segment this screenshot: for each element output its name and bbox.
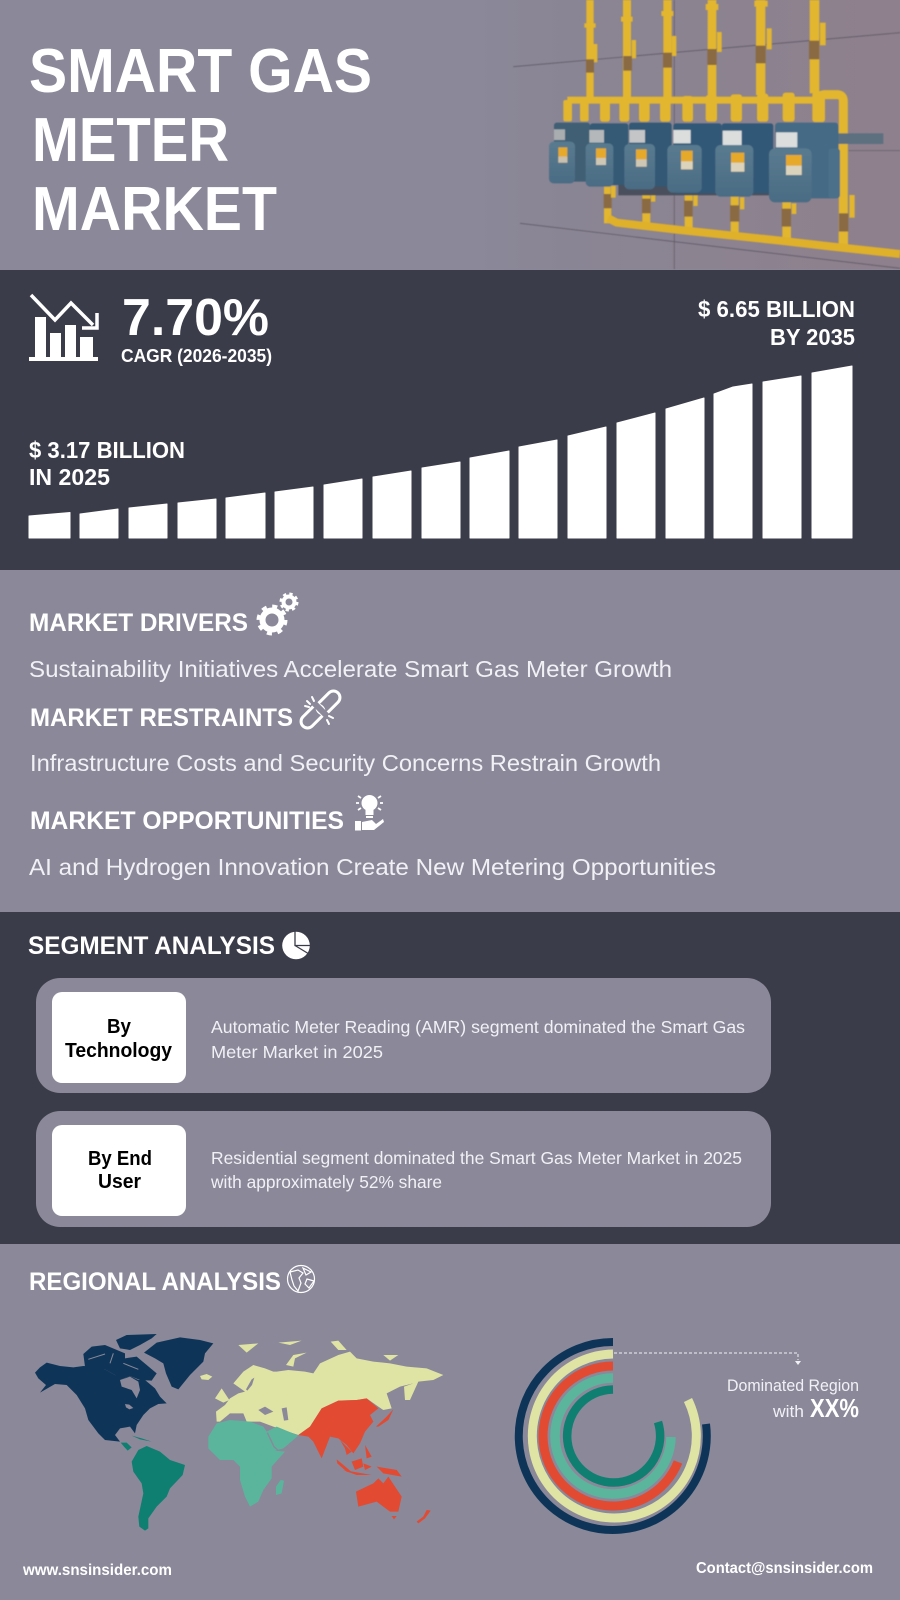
gas meter 5 <box>715 123 773 197</box>
footer: website: www.snsinsider.com <box>22 1562 172 1579</box>
title: METER <box>32 106 229 175</box>
2025 value label: $ 3.17 BILLION <box>29 437 185 463</box>
heading: segment analysis: SEGMENT ANALYSIS <box>28 932 275 960</box>
text: end user segment <box>210 1148 742 1192</box>
photo: gas meters on wall <box>480 0 900 269</box>
panel: segment analysis <box>0 912 900 1244</box>
gas meter 6 <box>769 123 840 202</box>
icon: bar chart with trend arrow <box>29 295 98 361</box>
title <box>29 37 372 244</box>
bar chart: rising market size <box>29 366 852 538</box>
region: europe and north asia <box>200 1341 443 1435</box>
panel: header <box>0 0 900 270</box>
heading: market restraints: MARKET RESTRAINTS <box>30 704 293 732</box>
panel: regional analysis <box>0 1244 900 1600</box>
panel: market dynamics <box>0 570 900 912</box>
region: south america <box>121 1436 185 1531</box>
dashed leader arrow <box>614 1353 801 1365</box>
2035 value label <box>698 296 855 350</box>
callout: dominated region <box>727 1377 859 1423</box>
panel: market growth <box>0 270 900 570</box>
icon: globe <box>288 1266 314 1292</box>
card: by technology <box>36 978 771 1093</box>
text: end user segment: Residential segment dominated the Smart Gas Meter Market in 2025 <box>211 1148 742 1168</box>
label box: by technology: By <box>107 1016 132 1038</box>
2025 value label: IN 2025 <box>29 464 110 490</box>
gas meter 2 <box>586 123 628 187</box>
text: market drivers: Sustainability Initiatives Accelerate Smart Gas Meter Growth <box>29 656 672 682</box>
upper gas pipes <box>563 0 826 122</box>
card: by end user <box>36 1111 771 1227</box>
text: market restraints: Infrastructure Costs and Security Concerns Restrain Growth <box>30 750 661 776</box>
heading: market drivers: MARKET DRIVERS <box>29 609 248 637</box>
footer: contact email: Contact@snsinsider.com <box>696 1560 873 1577</box>
label box: by technology: Technology <box>65 1040 173 1062</box>
lower gas pipes <box>604 186 855 248</box>
title: SMART GAS <box>29 37 372 106</box>
icon: broken chain link <box>298 688 343 731</box>
CAGR label: CAGR (2026-2035) <box>121 345 272 366</box>
world map <box>35 1334 443 1531</box>
radial bar chart <box>519 1342 707 1530</box>
label box: by end user: User <box>98 1171 141 1193</box>
brass valves <box>586 41 848 232</box>
region: africa and middle east <box>208 1420 298 1507</box>
label box: by technology <box>52 992 186 1083</box>
CAGR value: 7.70% <box>122 289 269 347</box>
icon: pie chart <box>282 931 311 959</box>
heading: market opportunities: MARKET OPPORTUNITIES <box>30 807 344 835</box>
title: MARKET <box>32 175 277 244</box>
2035 value label: $ 6.65 BILLION <box>698 296 855 322</box>
icon: gears <box>258 594 297 634</box>
gas meter 1 <box>549 123 590 183</box>
text: end user segment: with approximately 52% share <box>210 1172 442 1192</box>
callout: dominated region: Dominated Region <box>727 1377 859 1395</box>
label box: by end user: By End <box>88 1148 152 1170</box>
gas meter 4 <box>667 123 722 193</box>
2025 value label <box>29 437 185 490</box>
region: asia pacific <box>298 1398 431 1523</box>
text: technology segment: Meter Market in 2025 <box>211 1042 383 1062</box>
text: market opportunities: AI and Hydrogen Innovation Create New Metering Opportunities <box>29 854 716 880</box>
2035 value label: BY 2035 <box>770 324 855 350</box>
region: north america <box>35 1334 213 1442</box>
label box: by end user <box>52 1125 186 1216</box>
text: technology segment: Automatic Meter Reading (AMR) segment dominated the Smart Gas <box>211 1017 745 1037</box>
icon: hand holding light bulb <box>355 795 384 830</box>
callout: dominated region: with <box>772 1403 804 1421</box>
text: technology segment <box>211 1017 745 1062</box>
callout: dominated region: XX% <box>810 1393 859 1423</box>
heading: regional analysis: REGIONAL ANALYSIS <box>29 1268 281 1296</box>
gas meter 3 <box>624 123 672 189</box>
